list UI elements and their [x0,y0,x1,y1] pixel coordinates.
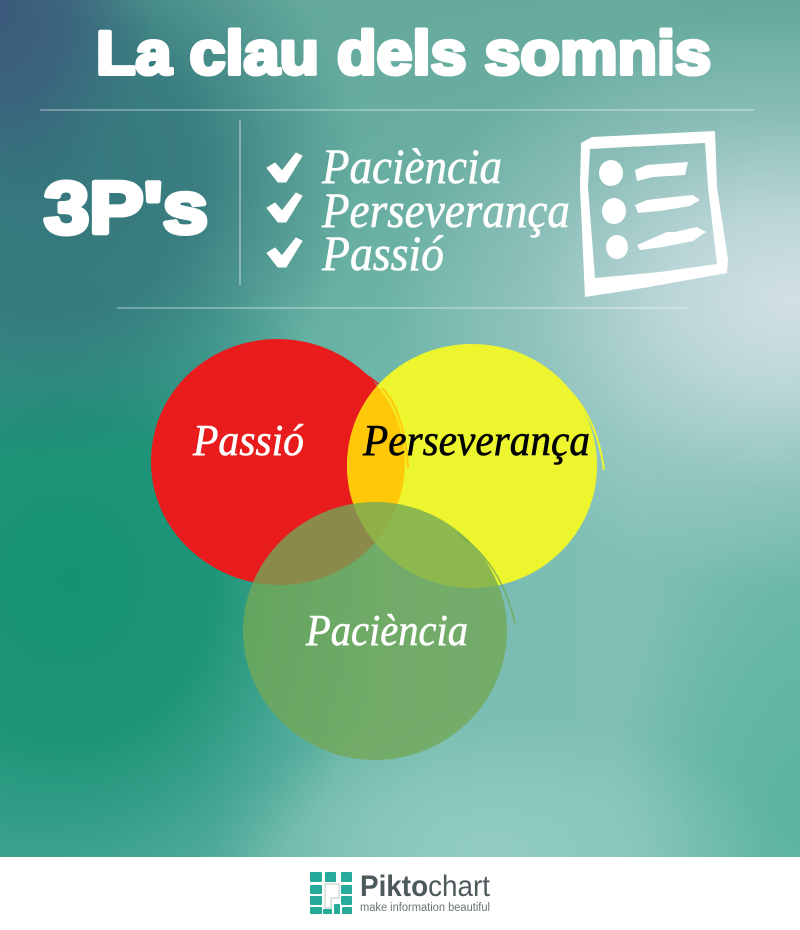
label: Paciència: Paciència [305,606,468,655]
logo wordmark: Piktochart [360,870,491,903]
footer [0,857,800,930]
icon: check 3 [267,238,302,267]
icon: check 2 [267,193,302,222]
circle: Perseverança [347,344,604,588]
icon: hand-drawn list [580,131,728,297]
logo tagline: make information beautiful [360,902,490,914]
title: La clau dels somnis [96,19,711,87]
heading: 3P's: 3P's [44,168,208,249]
list item: Passió: Passió [321,225,444,281]
list item: Perseverança: Perseverança [321,182,570,238]
logo mark [310,872,352,914]
venn diagram [151,339,604,760]
label: Passió: Passió [192,416,304,465]
circle: Passió [151,339,405,585]
list item: Paciència: Paciència [321,138,502,194]
icon: check 1 [267,153,302,182]
circle: Paciència [243,502,515,760]
checklist [267,138,570,281]
label: Perseverança: Perseverança [362,416,590,465]
